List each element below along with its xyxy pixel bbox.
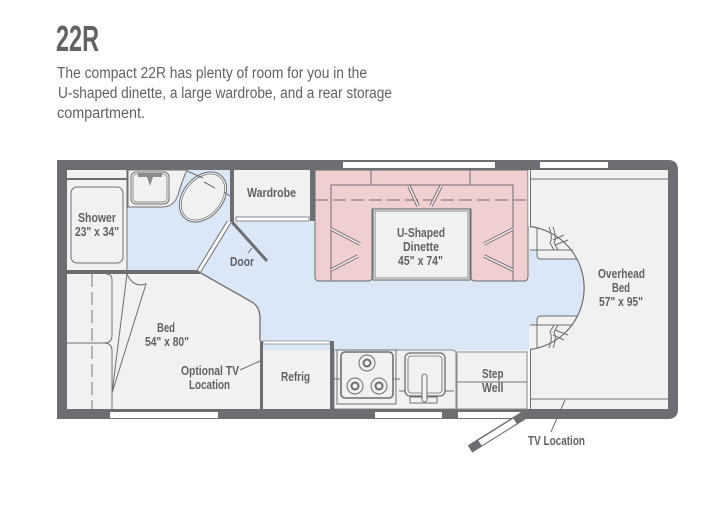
optional TV location label: Optional TV xyxy=(181,363,239,378)
icon: kitchen sink xyxy=(405,353,445,403)
panel: overhead bed xyxy=(529,170,668,409)
panel: shower: Shower xyxy=(78,210,116,225)
panel: shower xyxy=(67,170,127,270)
interior floor xyxy=(67,170,668,409)
panel: overhead bed: 57" x 95" xyxy=(599,294,643,309)
floor plan xyxy=(57,160,678,449)
title: 22R xyxy=(56,18,99,59)
dinette table: Dinette xyxy=(403,239,439,254)
panel: step well xyxy=(457,352,527,409)
blue walkway floor xyxy=(128,170,584,350)
TV location label: TV Location xyxy=(528,433,585,448)
TV location label xyxy=(528,400,585,448)
description text block: The compact 22R has plenty of room for you in the xyxy=(57,65,367,82)
panel: step well: Step xyxy=(482,366,504,381)
panel: kitchen counter xyxy=(334,350,456,409)
optional TV location label: Location xyxy=(189,377,230,392)
interior walls xyxy=(67,170,334,409)
panel: wardrobe xyxy=(234,170,310,221)
description text block xyxy=(57,65,392,122)
panel: overhead bed: Overhead xyxy=(598,266,645,281)
dinette table xyxy=(373,209,470,280)
entry door xyxy=(470,414,526,449)
windows xyxy=(110,162,608,418)
optional TV location label xyxy=(181,361,260,392)
panel: wardrobe: Wardrobe xyxy=(247,185,296,200)
cab arc xyxy=(530,226,584,350)
icon: toilet xyxy=(170,163,236,231)
table supports xyxy=(331,186,513,270)
description text block: compartment. xyxy=(57,105,145,122)
description text block: U-shaped dinette, a large wardrobe, and a rear storage xyxy=(58,85,392,102)
door xyxy=(230,222,267,269)
panel: overhead bed: Bed xyxy=(612,280,630,295)
door: Door xyxy=(230,254,254,269)
panel: step well: Well xyxy=(482,380,504,395)
panel: refrigerator xyxy=(263,341,330,384)
panel: bed xyxy=(67,272,260,409)
dinette table: U-Shaped xyxy=(397,225,445,240)
panel: refrigerator: Refrig xyxy=(281,369,310,384)
icon: stove xyxy=(337,350,396,404)
icon: bathroom sink xyxy=(128,170,187,207)
panel: bed: Bed xyxy=(157,320,175,335)
panel: U-shaped dinette xyxy=(315,170,528,281)
icon: upper cab seat xyxy=(530,227,577,259)
bathroom door xyxy=(199,222,229,271)
icon: lower cab seat xyxy=(530,316,577,348)
dinette table: 45" x 74" xyxy=(398,253,443,268)
exterior wall xyxy=(57,160,678,419)
panel: bed: 54" x 80" xyxy=(145,334,189,349)
panel: shower: 23" x 34" xyxy=(75,224,119,239)
